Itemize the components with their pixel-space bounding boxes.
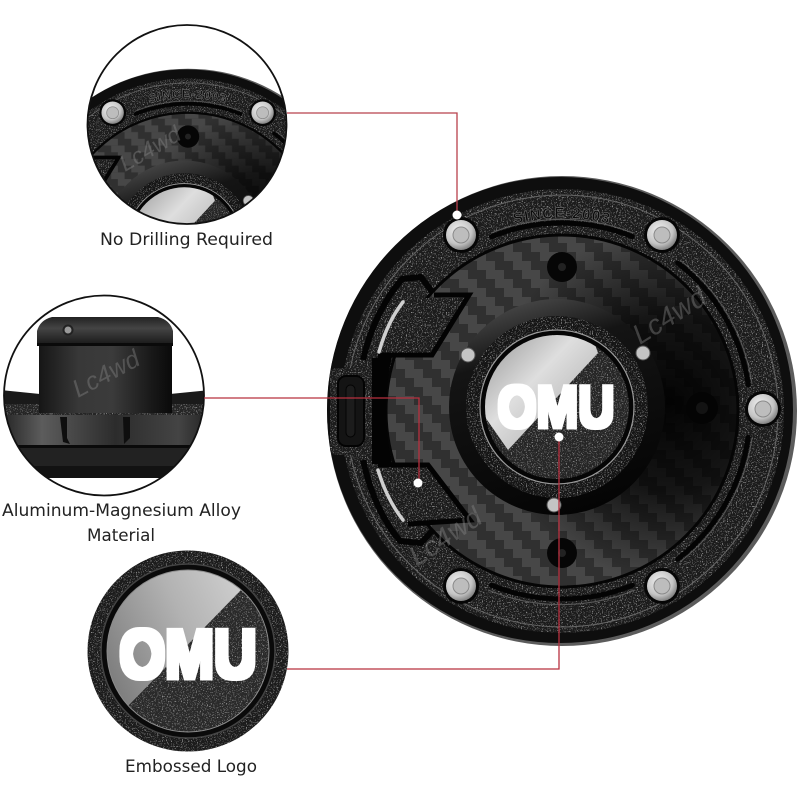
tab: left latch (330, 368, 372, 455)
callout circle: No Drilling Required: Lc4wd (114, 120, 186, 176)
label: No Drilling Required: No Drilling Required (100, 230, 273, 250)
label: Aluminum-Magnesium Alloy Material: Aluminum-Magnesium Alloy (2, 501, 241, 521)
callout circle: embossed logo: OMU (120, 616, 256, 692)
watermark: Lc4wd (627, 280, 713, 350)
leader line: alloy material (204, 398, 422, 488)
label: Aluminum-Magnesium Alloy Material (2, 501, 241, 546)
callout circle: embossed logo (88, 550, 288, 752)
logo: OMU: OMU (498, 375, 614, 440)
callout circle: No Drilling Required (86, 24, 288, 225)
label: Embossed Logo: Embossed Logo (125, 757, 257, 777)
callout circle: aluminum-magnesium alloy material: Lc4wd (68, 344, 146, 403)
main product: fuel cap (327, 176, 797, 646)
embossed text: SINCE-2003: SINCE-2003 (513, 207, 610, 224)
callout circle: aluminum-magnesium alloy material (0, 296, 210, 496)
label: Aluminum-Magnesium Alloy Material: Material (87, 526, 155, 546)
callout circle: No Drilling Required: SINCE-2003 (148, 89, 226, 103)
watermark: Lc4wd (403, 500, 489, 572)
leader line: No Drilling Required (287, 113, 462, 220)
leader line: embossed logo (287, 432, 564, 669)
